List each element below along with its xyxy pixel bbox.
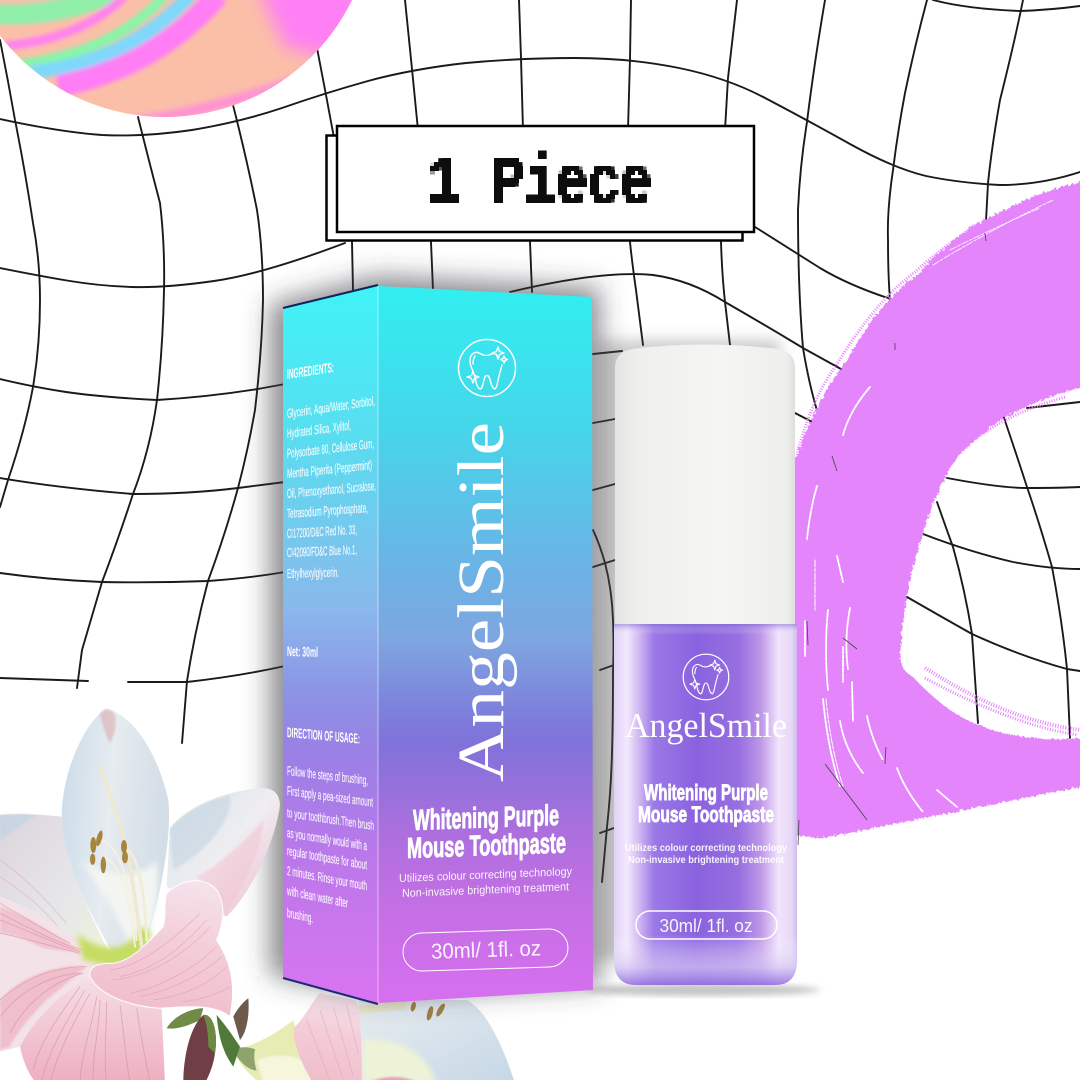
bottle cap: [615, 344, 795, 624]
pistil and stamens: [100, 767, 147, 947]
bottle tagline: Non-invasive brightening treatment: [628, 854, 784, 866]
ingredients panel text: CI42090/FD&C Blue No.1,: [287, 542, 357, 560]
box front face: [378, 286, 593, 1003]
bottle tagline: [625, 842, 787, 866]
second lily flower: [233, 993, 515, 1080]
directions panel text: brushing.: [287, 905, 313, 926]
lily flower: [0, 708, 280, 1080]
carton box: Net: 30ml: [287, 643, 318, 660]
box product name: Whitening Purple: [413, 800, 559, 837]
bottle: [614, 344, 797, 985]
bottle tagline: Utilizes colour correcting technology: [625, 842, 787, 854]
carton box: Polysorbate 80, Cellulose Gum,: [287, 436, 374, 461]
ingredients panel text: Ethylhexylglycerin.: [287, 565, 339, 581]
icon: bottle tooth logo: [683, 654, 729, 700]
box volume pill: 30ml/ 1fl. oz: [431, 936, 541, 964]
bottle body: [614, 624, 797, 985]
bottle product name: Mouse Toothpaste: [638, 802, 774, 827]
back petal: [62, 708, 169, 960]
box tagline: Utilizes colour correcting technology: [399, 866, 572, 885]
ingredients panel text: Hydrated Silica, Xylitol,: [287, 418, 351, 441]
directions panel text: Follow the steps of brushing,: [287, 763, 368, 788]
dry brush edges: [797, 193, 1080, 735]
carton box: First apply a pea-sized amount: [287, 783, 373, 810]
bottom petal: [20, 977, 165, 1080]
left petal: [0, 814, 113, 964]
ingredients panel text: Tetrasodium Pyrophosphate,: [287, 500, 368, 521]
box tagline: Non-invasive brightening treatment: [402, 881, 570, 900]
bottle volume pill: [636, 911, 777, 939]
pink brush stroke: [790, 181, 1080, 845]
directions panel text: 2 minutes. Rinse your mouth: [287, 863, 367, 893]
bottle product name: [638, 780, 774, 827]
stems and bud: [167, 998, 249, 1080]
ingredients panel text: Mentha Piperita (Peppermint): [287, 457, 372, 481]
ingredients panel text: [287, 359, 376, 581]
bottle product name: Whitening Purple: [644, 780, 768, 805]
box brand name: AngelSmile: [445, 422, 518, 782]
directions panel text: as you normally would with a: [287, 825, 367, 853]
box volume pill: [402, 928, 569, 972]
carton box: [283, 285, 593, 1004]
box side face: [283, 286, 378, 1003]
directions panel text: regular toothpaste for about: [287, 843, 367, 872]
directions panel text: with clean water after: [287, 883, 348, 911]
icon: box tooth logo: [458, 340, 516, 396]
directions panel text: DIRECTION OF USAGE:: [287, 724, 360, 747]
lower left petal: [0, 897, 113, 1052]
holographic gradient circle: [0, 0, 352, 117]
green throat: [77, 927, 152, 967]
carton box: Oil, Phenoxyethanol, Sucralose,: [287, 478, 376, 501]
box tagline: [399, 866, 572, 900]
box product name: Mouse Toothpaste: [407, 827, 566, 865]
front petal: [90, 881, 233, 1017]
directions panel text: [287, 724, 374, 926]
ingredients panel text: CI17200/D&C Red No. 33,: [287, 522, 357, 541]
anthers: [90, 830, 128, 873]
quantity label: [326, 126, 754, 240]
box product name: [407, 800, 566, 865]
ingredients panel text: Glycerin, Aqua/Water, Sorbitol,: [287, 393, 375, 421]
product shadows: [270, 276, 820, 998]
ingredients panel text: INGREDIENTS:: [287, 359, 334, 382]
carton box: to your toothbrush.Then brush: [287, 805, 374, 833]
label text: 1 Piece: [428, 146, 652, 225]
right petal: [167, 788, 280, 917]
bottle brand name: AngelSmile: [625, 706, 787, 745]
bottle volume pill: 30ml/ 1fl. oz: [660, 916, 752, 936]
